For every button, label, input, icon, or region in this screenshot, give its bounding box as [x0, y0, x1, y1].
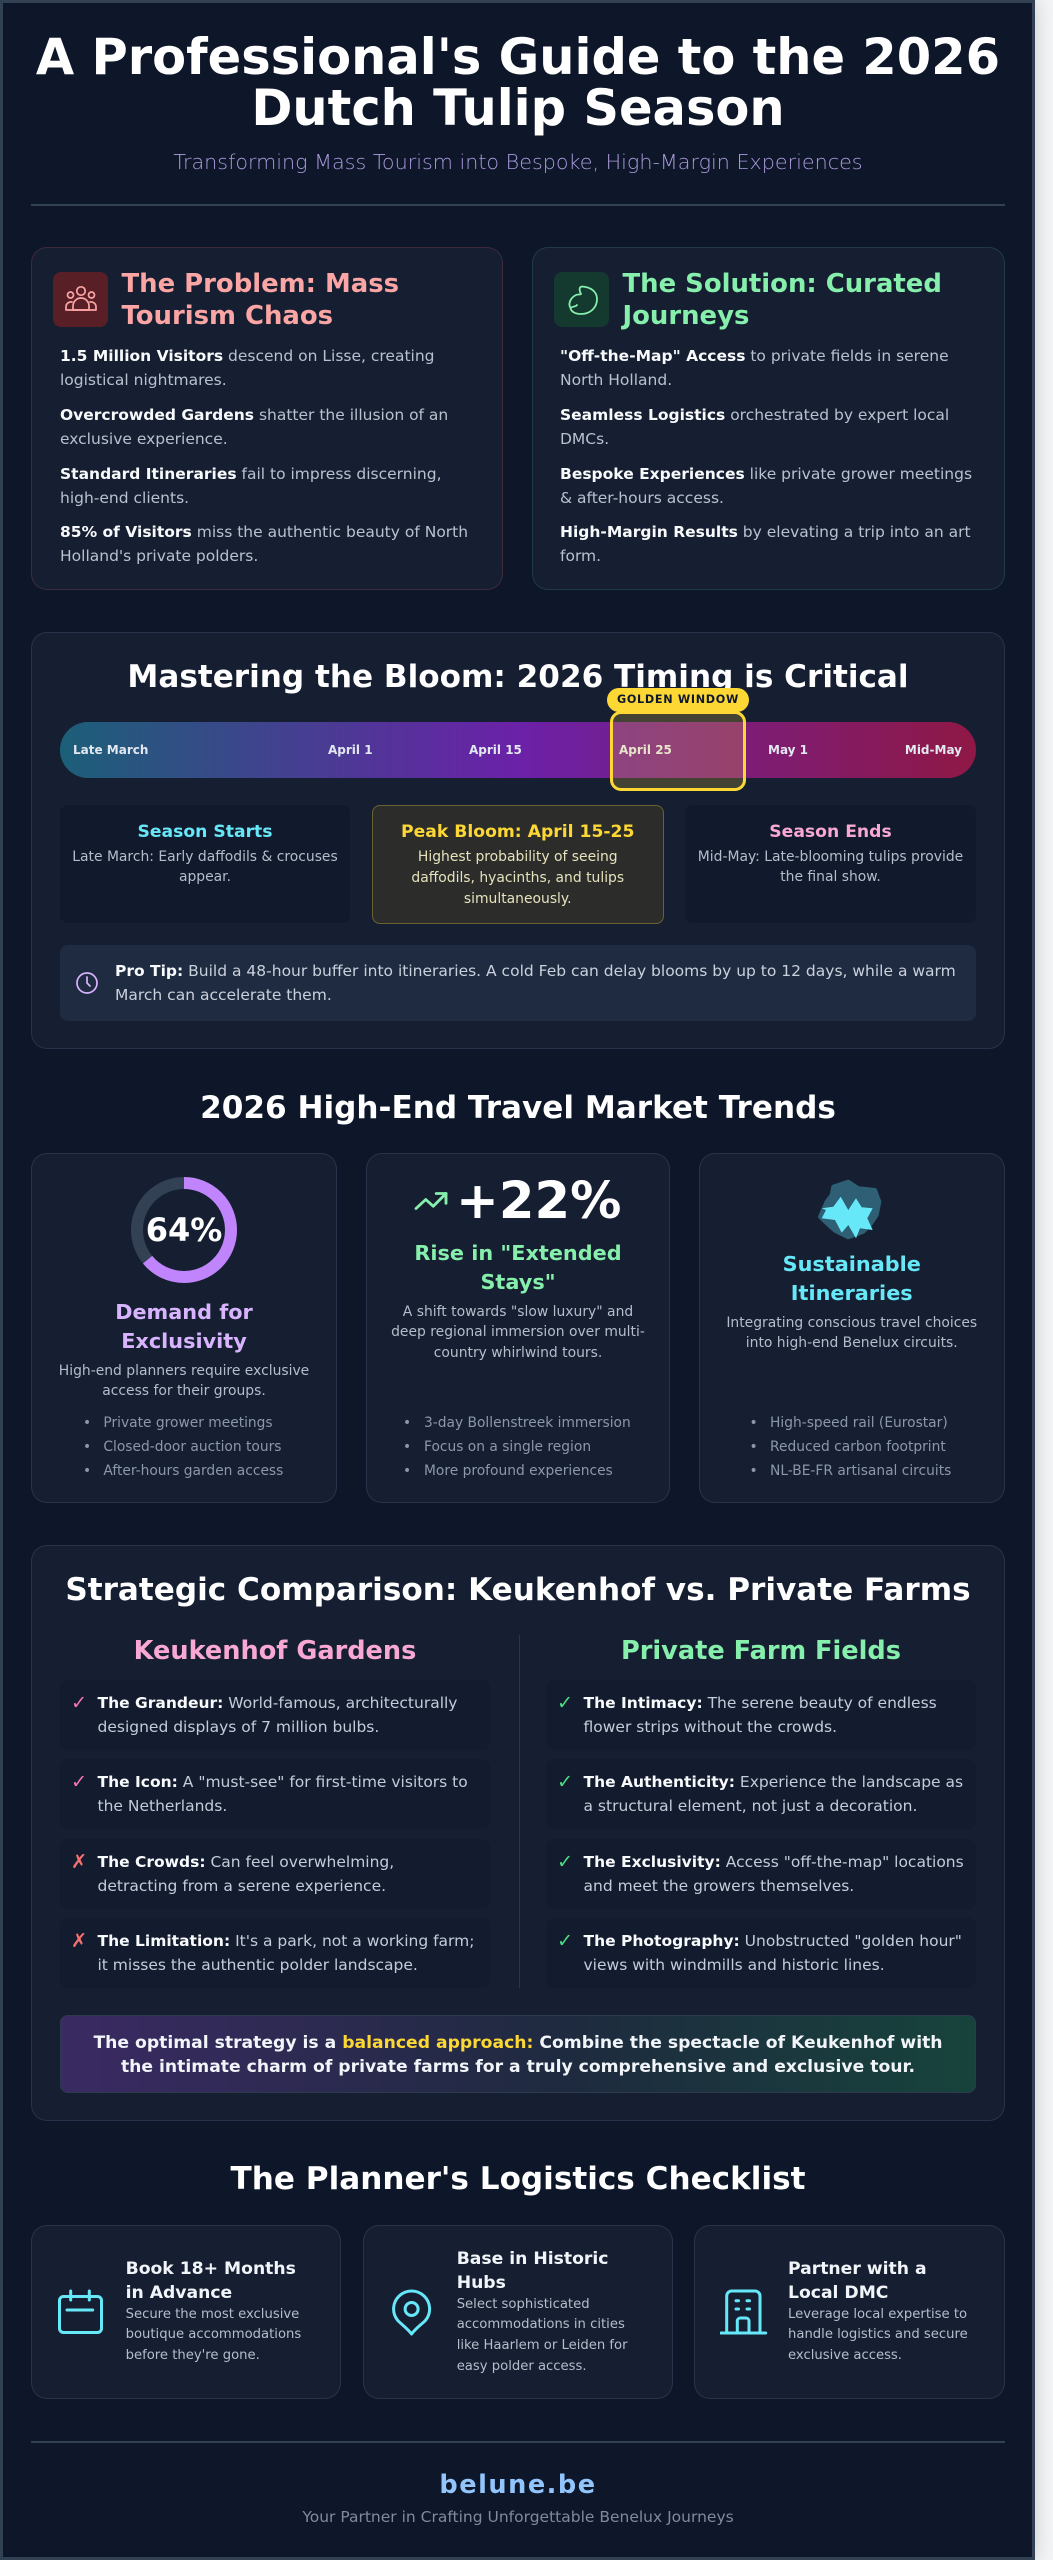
list: extended stays: Focus on a single region [424, 1439, 591, 1455]
text: solution points: High-Margin Results by elevating a trip into an art [560, 523, 971, 541]
callout: pro tip [60, 945, 976, 1021]
heading: logistics checklist: The Planner's Logistics Checklist [231, 2161, 805, 2197]
icon: building [720, 2290, 768, 2334]
text: problem points: high-end clients. [60, 489, 189, 507]
card: demand for exclusivity [31, 1153, 337, 1503]
text: pro tip: Pro Tip: Build a 48-hour buffer into itineraries. A cold Feb can delay blooms by up to 12 days, while a warm [115, 962, 956, 980]
subtitle: Transforming Mass Tourism into Bespoke, High-Margin Experiences [173, 150, 863, 174]
heading: strategic comparison: Strategic Comparison: Keukenhof vs. Private Farms [65, 1572, 971, 1608]
text: the crowds: The Crowds: Can feel overwhelming, [98, 1853, 394, 1871]
text: the grandeur: designed displays of 7 million bulbs. [98, 1718, 379, 1736]
list: sustainable: • [750, 1439, 758, 1455]
list: sustainable: Reduced carbon footprint [770, 1439, 946, 1455]
text: solution points: & after-hours access. [560, 489, 724, 507]
heading: book: Book 18+ Months [126, 2259, 296, 2279]
label: april 15: April 15 [469, 743, 522, 757]
icon: crowd of people [53, 272, 108, 327]
text: the exclusivity [584, 1853, 964, 1895]
timeline bar [60, 722, 976, 778]
text: sustainable: Integrating conscious travel choices [726, 1315, 977, 1331]
icon: clock [76, 972, 98, 994]
text: solution points: DMCs. [560, 430, 609, 448]
card: extended stays [366, 1153, 670, 1503]
row: the photography [546, 1918, 976, 1988]
text: the photography: views with windmills and historic lines. [584, 1956, 885, 1974]
list: extended stays: • [403, 1463, 411, 1479]
label: may 1: May 1 [768, 743, 808, 757]
heading: extended stays: Rise in "Extended [414, 1241, 622, 1265]
panel: bloom timing [31, 632, 1005, 1049]
text: dmc: handle logistics and secure [788, 2327, 968, 2342]
row: the crowds [60, 1839, 490, 1909]
heading: private farm fields: Private Farm Fields [621, 1636, 901, 1666]
text: problem points: 85% of Visitors miss the authentic beauty of North [60, 523, 468, 541]
text: solution points: Seamless Logistics orchestrated by expert local [560, 406, 949, 424]
text: extended stays [391, 1304, 645, 1361]
list: sustainable [750, 1415, 951, 1479]
row: the limitation: ✗ [71, 1929, 87, 1952]
text: season starts: Late March: Early daffodils & crocuses [72, 849, 338, 865]
footer tagline: Your Partner in Crafting Unforgettable Benelux Journeys [302, 2508, 734, 2526]
heading: extended stays [414, 1241, 622, 1294]
list: extended stays: • [403, 1439, 411, 1455]
heading: the solution: Journeys [622, 301, 749, 331]
row: the grandeur: ✓ [71, 1691, 87, 1714]
info: peak bloom: Peak Bloom: April 15-25 [401, 822, 634, 842]
text: problem points: logistical nightmares. [60, 371, 227, 389]
text: the crowds [98, 1853, 394, 1895]
callout: balanced approach [60, 2015, 976, 2093]
row: the crowds: ✗ [71, 1850, 87, 1873]
text: the icon: the Netherlands. [98, 1797, 227, 1815]
heading: dmc: Partner with a [788, 2259, 927, 2279]
heading: demand: Exclusivity [121, 1328, 247, 1352]
badge: golden window: GOLDEN WINDOW [617, 693, 739, 706]
text: the photography: The Photography: Unobstructed "golden hour" [584, 1932, 962, 1950]
label: april 25: April 25 [619, 743, 672, 757]
text: the authenticity: a structural element, not just a decoration. [584, 1797, 917, 1815]
heading: hubs [457, 2249, 608, 2293]
text: extended stays: A shift towards "slow luxury" and [403, 1304, 633, 1320]
text: the limitation [98, 1932, 474, 1974]
text: peak bloom: Highest probability of seeing [418, 849, 618, 865]
row: the icon [60, 1759, 490, 1829]
list: demand: • [83, 1439, 91, 1455]
list: extended stays: More profound experiences [424, 1463, 613, 1479]
heading: keukenhof gardens: Keukenhof Gardens [134, 1636, 416, 1666]
text: the limitation: The Limitation: It's a park, not a working farm; [98, 1932, 474, 1950]
panel: strategic comparison [31, 1545, 1005, 2121]
heading: dmc: Local DMC [788, 2283, 888, 2303]
label: mid-may: Mid-May [905, 743, 962, 757]
text: the grandeur: The Grandeur: World-famous, architecturally [98, 1694, 457, 1712]
text: dmc: Leverage local expertise to [788, 2307, 967, 2322]
text: book: before they're gone. [126, 2348, 260, 2363]
text: demand: access for their groups. [102, 1383, 266, 1399]
text: the photography [584, 1932, 962, 1974]
heading: sustainable: Itineraries [791, 1280, 913, 1304]
footer brand: belune.be [439, 2470, 597, 2500]
row: the authenticity: ✓ [557, 1770, 573, 1793]
info: season ends: Season Ends [769, 822, 892, 842]
heading: demand [115, 1300, 253, 1352]
heading: the problem [122, 269, 399, 331]
text: problem points: 1.5 Million Visitors descend on Lisse, creating [60, 347, 435, 365]
row: the photography: ✓ [557, 1929, 573, 1952]
card: local dmc [694, 2225, 1005, 2399]
heading: the problem: The Problem: Mass [122, 269, 399, 299]
text: the intimacy [584, 1694, 937, 1736]
list: sustainable: NL-BE-FR artisanal circuits [770, 1463, 951, 1479]
row: the exclusivity [546, 1839, 976, 1909]
icon: trending arrow [414, 1192, 448, 1210]
text: the intimacy: The Intimacy: The serene beauty of endless [584, 1694, 937, 1712]
label: late march: Late March [73, 743, 148, 757]
text: dmc [788, 2307, 968, 2363]
list: sustainable: High-speed rail (Eurostar) [770, 1415, 948, 1431]
text: season starts: appear. [179, 869, 231, 885]
heading: hubs: Base in Historic [457, 2249, 608, 2269]
text: demand [59, 1363, 309, 1399]
info: season ends [685, 805, 976, 923]
list: demand: • [83, 1415, 91, 1431]
label: april 1: April 1 [328, 743, 373, 757]
list: sustainable: • [750, 1415, 758, 1431]
text: problem points: Holland's private polders. [60, 547, 258, 565]
info: season starts: Season Starts [137, 822, 272, 842]
heading: extended stays: Stays" [480, 1270, 556, 1294]
text: the exclusivity: and meet the growers themselves. [584, 1877, 854, 1895]
card: historic hubs [363, 2225, 673, 2399]
text: sustainable [726, 1315, 977, 1351]
list: extended stays [403, 1415, 631, 1479]
icon: map pin [392, 2290, 432, 2336]
list: demand: Closed-door auction tours [103, 1439, 281, 1455]
text: the grandeur [98, 1694, 457, 1736]
text: peak bloom [411, 849, 624, 907]
text: problem points: exclusive experience. [60, 430, 228, 448]
text: problem points [60, 347, 468, 565]
list: sustainable: • [750, 1463, 758, 1479]
card: book in advance [31, 2225, 341, 2399]
text: the intimacy: flower strips without the crowds. [584, 1718, 837, 1736]
text: demand: High-end planners require exclusive [59, 1363, 309, 1379]
text: book: boutique accommodations [126, 2327, 301, 2342]
list: demand: • [83, 1463, 91, 1479]
golden window highlight [610, 711, 746, 791]
callout: balanced approach: the intimate charm of private farms for a truly comprehensive and exclusive tour. [121, 2056, 915, 2076]
heading: market trends: 2026 High-End Travel Market Trends [200, 1090, 836, 1126]
text: sustainable: into high-end Benelux circuits. [746, 1335, 958, 1351]
heading: sustainable: Sustainable [783, 1252, 921, 1276]
row: the exclusivity: ✓ [557, 1850, 573, 1873]
text: pro tip: March can accelerate them. [115, 986, 332, 1004]
icon: leaf loop [554, 272, 609, 327]
heading: sustainable [783, 1252, 921, 1304]
heading: the problem: Tourism Chaos [122, 301, 333, 331]
heading: the solution [621, 269, 942, 331]
heading: mastering the bloom: Mastering the Bloom: 2026 Timing is Critical [127, 659, 909, 695]
text: pro tip [115, 962, 956, 1004]
text: the authenticity [584, 1773, 963, 1815]
heading: book: in Advance [126, 2283, 232, 2303]
card: sustainable itineraries [698, 1153, 1005, 1503]
list: extended stays: 3-day Bollenstreek immersion [424, 1415, 631, 1431]
text: the exclusivity: The Exclusivity: Access "off-the-map" locations [584, 1853, 964, 1871]
text: book [126, 2307, 301, 2363]
list: demand: Private grower meetings [103, 1415, 273, 1431]
text: the limitation: it misses the authentic polder landscape. [98, 1956, 418, 1974]
icon: calendar [58, 2290, 103, 2334]
text: hubs: accommodations in cities [457, 2317, 625, 2332]
text: problem points: Overcrowded Gardens shatter the illusion of an [60, 406, 448, 424]
text: peak bloom: daffodils, hyacinths, and tulips [411, 870, 624, 886]
heading: dmc [788, 2259, 927, 2303]
list: demand: After-hours garden access [103, 1463, 283, 1479]
text: book: Secure the most exclusive [126, 2307, 299, 2322]
text: the authenticity: The Authenticity: Experience the landscape as [584, 1773, 963, 1791]
panel: problem [31, 247, 503, 590]
text: season starts [72, 849, 338, 885]
row: the authenticity [546, 1759, 976, 1829]
row: the intimacy: ✓ [557, 1691, 573, 1714]
list: demand [83, 1415, 283, 1479]
donut chart: 64% [131, 1177, 237, 1283]
title [36, 28, 1000, 137]
text: dmc: exclusive access. [788, 2348, 902, 2363]
text: season ends: Mid-May: Late-blooming tulips provide [698, 849, 963, 865]
text: the icon: The Icon: A "must-see" for first-time visitors to [98, 1773, 468, 1791]
text: hubs: Select sophisticated [457, 2297, 590, 2312]
text: peak bloom: simultaneously. [464, 891, 572, 907]
row: the limitation [60, 1918, 490, 1988]
info: peak bloom [372, 805, 664, 924]
panel: solution [532, 247, 1005, 590]
callout: balanced approach: The optimal strategy is a balanced approach: Combine the spectacle of Keukenhof with [93, 2032, 943, 2052]
heading: hubs: Hubs [457, 2273, 506, 2293]
text: hubs [457, 2297, 628, 2374]
text: solution points: "Off-the-Map" Access to private fields in serene [560, 347, 949, 365]
heading: demand: Demand for [115, 1300, 253, 1324]
icon: leaf burst [818, 1180, 882, 1240]
text: solution points: Bespoke Experiences like private grower meetings [560, 465, 972, 483]
badge: golden window [607, 688, 749, 712]
stat: +22%: +22% [456, 1171, 621, 1231]
title: Dutch Tulip Season [251, 79, 785, 137]
text: season ends [698, 849, 963, 885]
text: problem points: Standard Itineraries fail to impress discerning, [60, 465, 442, 483]
title: A Professional's Guide to the 2026 [36, 28, 1000, 86]
row: the intimacy [546, 1680, 976, 1750]
heading: book [126, 2259, 296, 2303]
donut chart: 64%: 64% [146, 1211, 222, 1249]
row: the icon: ✓ [71, 1770, 87, 1793]
text: hubs: easy polder access. [457, 2359, 587, 2374]
text: season ends: the final show. [780, 869, 881, 885]
text: extended stays: deep regional immersion over multi- [391, 1324, 645, 1340]
text: the icon [98, 1773, 468, 1815]
text: solution points [560, 347, 972, 565]
heading: the solution: The Solution: Curated [622, 269, 942, 299]
text: solution points: form. [560, 547, 601, 565]
text: extended stays: country whirlwind tours. [434, 1345, 602, 1361]
text: solution points: North Holland. [560, 371, 672, 389]
list: extended stays: • [403, 1415, 411, 1431]
row: the grandeur [60, 1680, 490, 1750]
text: the crowds: detracting from a serene experience. [98, 1877, 386, 1895]
text: hubs: like Haarlem or Leiden for [457, 2338, 628, 2353]
info: season starts [60, 805, 350, 923]
